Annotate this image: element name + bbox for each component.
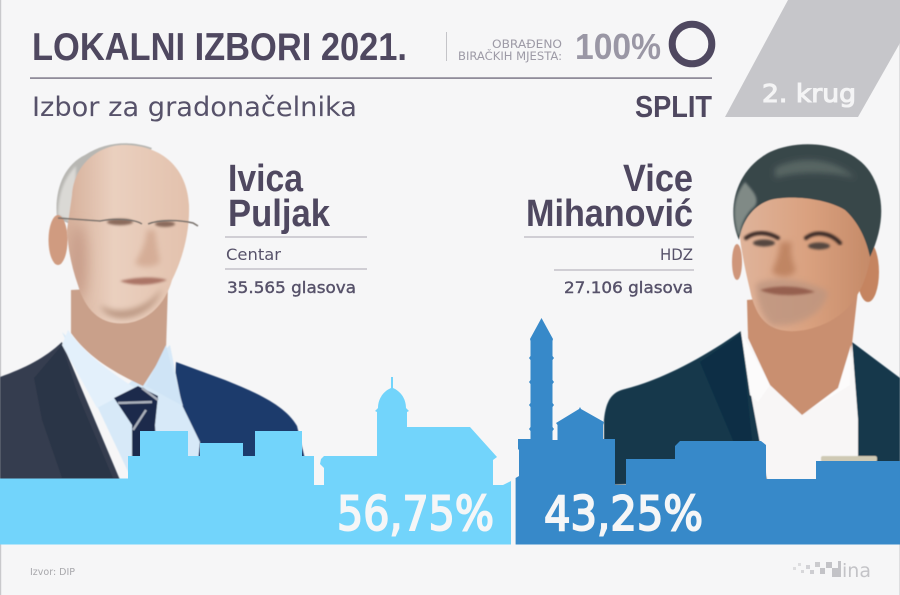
collar right <box>156 345 184 406</box>
hair highlight <box>775 160 855 178</box>
neck <box>71 285 168 386</box>
candidate text: Ivica Puljak: Puljak <box>228 193 331 235</box>
tie stripes <box>118 388 158 430</box>
title: LOKALNI IZBORI 2021. <box>32 26 407 69</box>
left lapel shade <box>34 345 113 478</box>
source: Izvor: DIP <box>30 567 75 578</box>
candidate text: Vice Mihanović: 27.106 glasova <box>564 278 693 297</box>
right ear <box>857 242 879 302</box>
candidate text: Vice Mihanović: HDZ <box>660 245 693 264</box>
processed polling stations status: OBRAĐENO <box>492 37 562 51</box>
candidate text: Ivica Puljak: Centar <box>226 245 281 264</box>
jacket left <box>604 331 767 485</box>
shirt <box>62 332 200 480</box>
eyes <box>753 239 830 250</box>
collar <box>741 332 851 415</box>
candidate text: Vice Mihanović <box>524 158 694 297</box>
skyline bar: Mihanović share <box>516 318 900 544</box>
left ear <box>732 244 742 280</box>
neck <box>747 290 858 415</box>
nose <box>772 242 796 277</box>
tie <box>114 386 158 456</box>
percentage: Mihanović: 43,25% <box>544 487 703 542</box>
subtitle: Izbor za gradonačelnika <box>32 92 357 123</box>
processed polling stations status <box>446 24 712 67</box>
suit right side <box>174 362 305 456</box>
ear <box>48 215 68 265</box>
jacket lapel shade <box>700 334 752 445</box>
hair <box>733 144 881 257</box>
nose <box>135 230 160 267</box>
candidate text: Ivica Puljak <box>225 158 367 297</box>
hair grey temple <box>734 182 757 235</box>
round badge <box>725 0 900 117</box>
mouth <box>120 277 167 285</box>
Hina logo <box>793 560 871 582</box>
header rule <box>30 77 712 79</box>
jacket right <box>852 342 900 470</box>
round badge: 2. krug <box>762 79 856 108</box>
jaw stubble <box>100 288 162 319</box>
back hair <box>56 143 152 225</box>
stubble <box>756 279 828 325</box>
suit jacket <box>0 342 120 480</box>
hair light <box>58 166 76 222</box>
processed polling stations status: BIRAČKIH MJESTA: <box>458 48 562 63</box>
eyebrows <box>746 233 840 243</box>
Hina logo: ina <box>842 560 871 582</box>
head <box>738 175 871 331</box>
head <box>66 144 190 324</box>
skyline bar: Puljak share <box>0 377 511 544</box>
white shirt <box>741 331 858 480</box>
glasses <box>58 218 198 226</box>
candidate text: Ivica Puljak: 35.565 glasova <box>227 278 356 297</box>
candidate text: Vice Mihanović: Mihanović <box>526 193 693 235</box>
collar left <box>62 330 135 408</box>
photo: Vice Mihanović <box>604 144 900 485</box>
processed polling stations status: 100% <box>575 26 661 67</box>
phone in pocket <box>821 456 877 462</box>
mouth <box>760 286 815 295</box>
cheek shadow <box>69 224 87 300</box>
percentage: Puljak: 56,75% <box>337 487 494 542</box>
city name: SPLIT <box>635 89 712 124</box>
candidate text: Ivica Puljak: Ivica <box>228 158 304 200</box>
eye sockets <box>107 219 175 227</box>
candidate text: Vice Mihanović: Vice <box>623 158 693 200</box>
photo: Ivica Puljak <box>0 140 310 480</box>
